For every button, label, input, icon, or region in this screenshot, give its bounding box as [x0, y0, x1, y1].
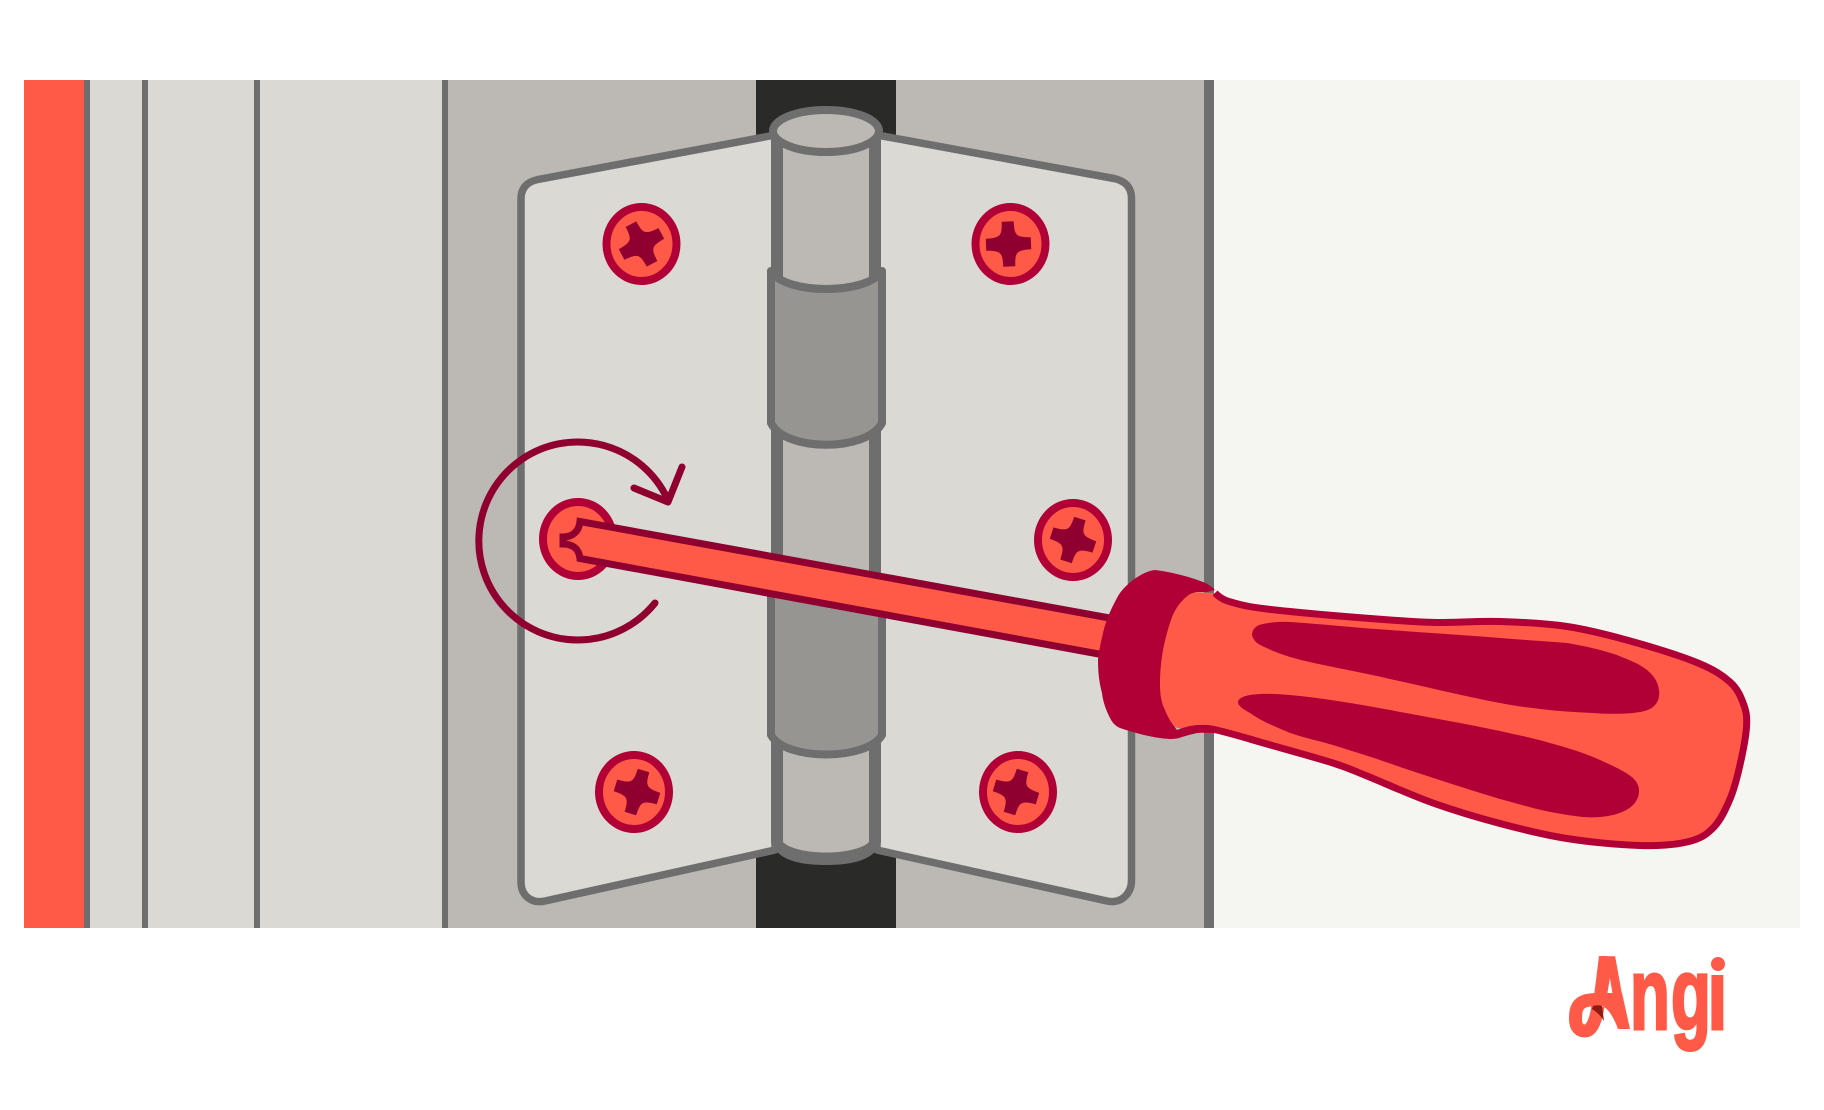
logo shadow — [1592, 1005, 1604, 1021]
logo: Angi — [1569, 956, 1725, 1052]
screw: middle right — [1038, 503, 1108, 577]
panel: door and frame background — [24, 80, 1800, 928]
logo letter i: i — [1708, 936, 1727, 1051]
logo letter n: n — [1630, 937, 1670, 1052]
logo letter A top: A — [1592, 938, 1628, 1052]
hinge pin barrel — [771, 110, 881, 865]
screwdriver shaft — [563, 522, 1115, 657]
lower hinge knuckle — [771, 580, 882, 754]
arrow: clockwise rotation — [479, 442, 682, 640]
screw: bottom right — [983, 755, 1053, 829]
screw: top left — [606, 207, 676, 281]
screw: middle left being turned — [543, 502, 613, 576]
screwdriver — [563, 522, 1747, 846]
pin bottom lip — [771, 838, 881, 865]
logo A foot — [1596, 993, 1630, 1029]
screw: bottom left — [599, 755, 669, 829]
panel: left hinge plate — [521, 135, 775, 902]
logo A left edge — [1594, 956, 1607, 996]
logo swash — [1576, 999, 1613, 1031]
logo letter g: g — [1671, 937, 1711, 1052]
handle grip: upper — [1252, 622, 1659, 714]
screw: top right — [976, 207, 1046, 281]
logo dot — [1711, 957, 1725, 971]
pin top cap — [773, 110, 879, 152]
handle grip: lower — [1238, 694, 1639, 817]
upper hinge knuckle — [771, 271, 882, 445]
panel: right hinge plate — [877, 135, 1132, 902]
screwdriver handle — [1135, 590, 1747, 846]
handle collar — [1098, 570, 1215, 739]
